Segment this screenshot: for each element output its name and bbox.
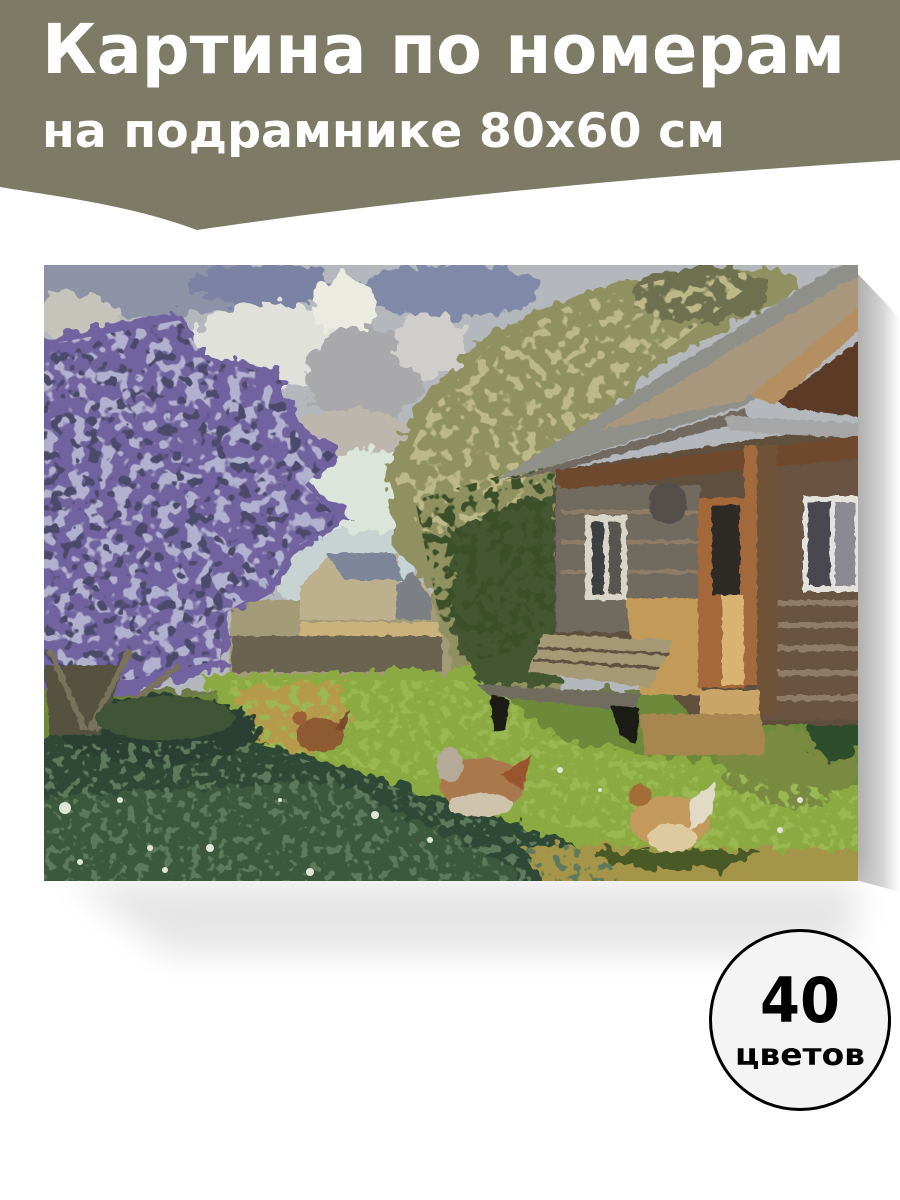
lilac light blossoms bbox=[44, 320, 340, 680]
painting bbox=[44, 265, 858, 881]
chicken left bbox=[293, 708, 350, 752]
chicken middle bbox=[437, 747, 532, 817]
tree olive crown bbox=[630, 267, 770, 323]
grass highlights bbox=[220, 680, 860, 850]
chicken right bbox=[629, 782, 716, 852]
distant house and fence bbox=[230, 553, 460, 690]
tree pale leaves bbox=[395, 270, 770, 540]
sky bbox=[44, 265, 858, 696]
big tree behind the house bbox=[385, 265, 800, 690]
badge label: цветов bbox=[735, 1038, 865, 1073]
header banner bbox=[0, 0, 900, 230]
windows bbox=[585, 515, 627, 600]
lawn bbox=[44, 664, 858, 881]
subtitle: на подрамнике 80х60 см bbox=[42, 104, 725, 159]
canvas shadow bbox=[70, 272, 900, 955]
dark grass texture bbox=[44, 740, 620, 881]
porch steps bbox=[640, 714, 765, 755]
tree dark foliage bbox=[450, 490, 560, 685]
tree dark leaves bbox=[415, 460, 555, 660]
cottage wall bbox=[554, 434, 858, 726]
bench bbox=[476, 634, 674, 745]
painting base bbox=[44, 682, 666, 701]
lilac dark gaps bbox=[44, 320, 340, 680]
door bbox=[698, 498, 746, 688]
cottage bbox=[496, 255, 880, 755]
title: Картина по номерам bbox=[42, 10, 845, 90]
wreath bbox=[649, 482, 687, 524]
badge number: 40 bbox=[760, 964, 840, 1037]
lilac trunk bbox=[44, 650, 235, 740]
badge: 40 colours bbox=[710, 930, 890, 1110]
lilac bush bbox=[30, 312, 350, 692]
chickens bbox=[293, 708, 716, 852]
flowers in grass bbox=[59, 767, 803, 876]
roof bbox=[496, 265, 858, 480]
